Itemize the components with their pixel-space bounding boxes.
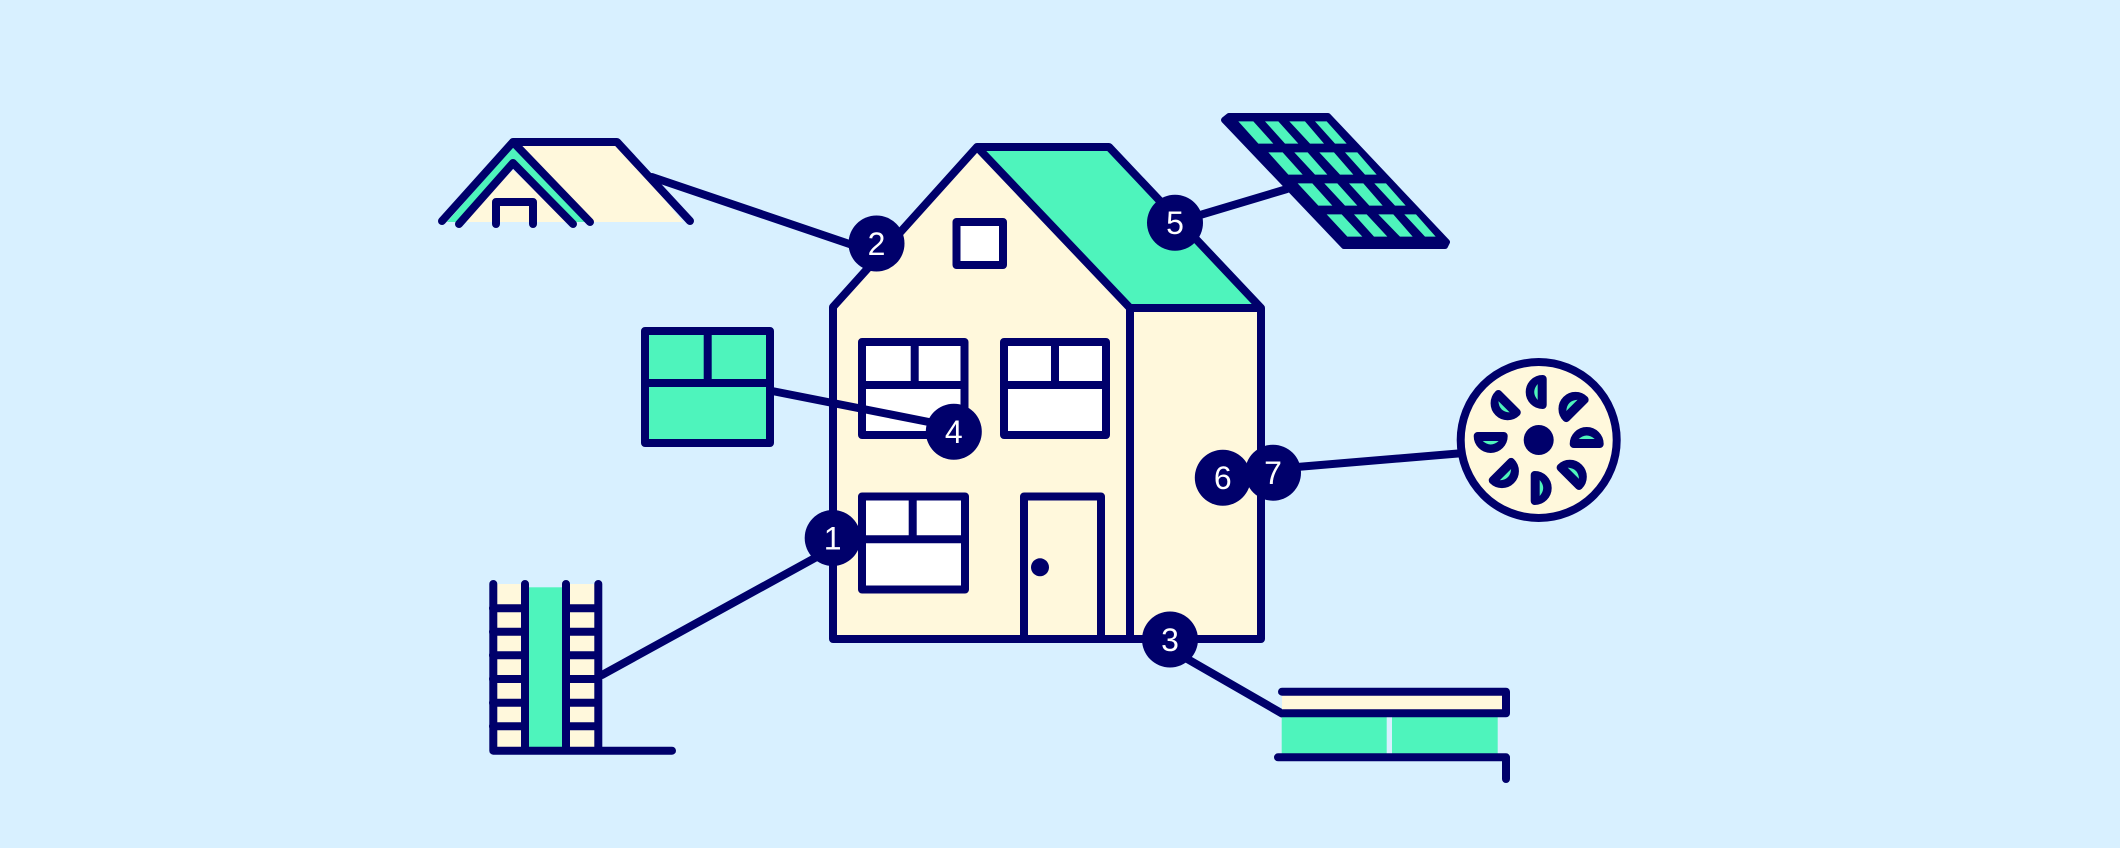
panel frame — [1224, 116, 1447, 246]
roof slope — [977, 147, 1261, 308]
house wall fill — [833, 147, 1261, 639]
marker 6 — [1195, 450, 1251, 506]
leader line: wall — [602, 548, 833, 675]
slab cream layer — [1282, 692, 1506, 713]
fan hub — [1524, 425, 1554, 455]
mint insulation column — [529, 587, 562, 747]
marker 2 — [848, 216, 904, 272]
icon: wall cavity with ladders — [493, 584, 672, 751]
panel cells — [1238, 121, 1436, 237]
icon: green window — [645, 331, 770, 443]
upper right window — [1004, 342, 1106, 435]
marker 7: 7 — [1264, 455, 1282, 491]
attic window — [956, 222, 1003, 265]
marker 1: 1 — [824, 520, 842, 556]
attic lines — [442, 142, 690, 224]
lower left window — [862, 496, 965, 590]
attic mint layer — [447, 147, 585, 222]
ladder rungs — [493, 608, 598, 726]
icon: ventilation fan — [1461, 362, 1617, 518]
leader line: attic — [652, 177, 876, 253]
icon: attic insulation — [442, 142, 690, 224]
slab lines — [1278, 692, 1506, 779]
marker 2: 2 — [868, 226, 885, 262]
ladder fill left — [493, 584, 525, 749]
marker 3: 3 — [1161, 622, 1179, 658]
leader line: ventilation — [1273, 454, 1458, 469]
leader line: window — [767, 390, 954, 427]
marker 7 — [1245, 445, 1301, 501]
door — [1024, 496, 1101, 639]
attic cream fill — [463, 142, 683, 222]
leader line: solar panel — [1175, 189, 1287, 222]
fan disc — [1461, 362, 1617, 518]
upper left window — [862, 342, 964, 435]
marker 1 — [805, 510, 861, 566]
ladder fill right — [566, 584, 598, 749]
icon: solar panel — [1224, 116, 1447, 246]
house — [833, 147, 1261, 639]
marker 4: 4 — [945, 414, 963, 450]
marker 5: 5 — [1166, 205, 1184, 241]
slab mint right — [1392, 716, 1498, 754]
slab mint left — [1282, 716, 1387, 754]
marker 3 — [1142, 612, 1198, 668]
marker 6: 6 — [1214, 460, 1232, 496]
ladder lines — [493, 584, 672, 751]
house outline — [833, 147, 1261, 639]
fan blades — [1478, 379, 1600, 501]
marker 4 — [926, 404, 982, 460]
marker 5 — [1147, 195, 1203, 251]
icon: floor slab — [1278, 692, 1506, 779]
leader line: floor — [1170, 649, 1282, 714]
